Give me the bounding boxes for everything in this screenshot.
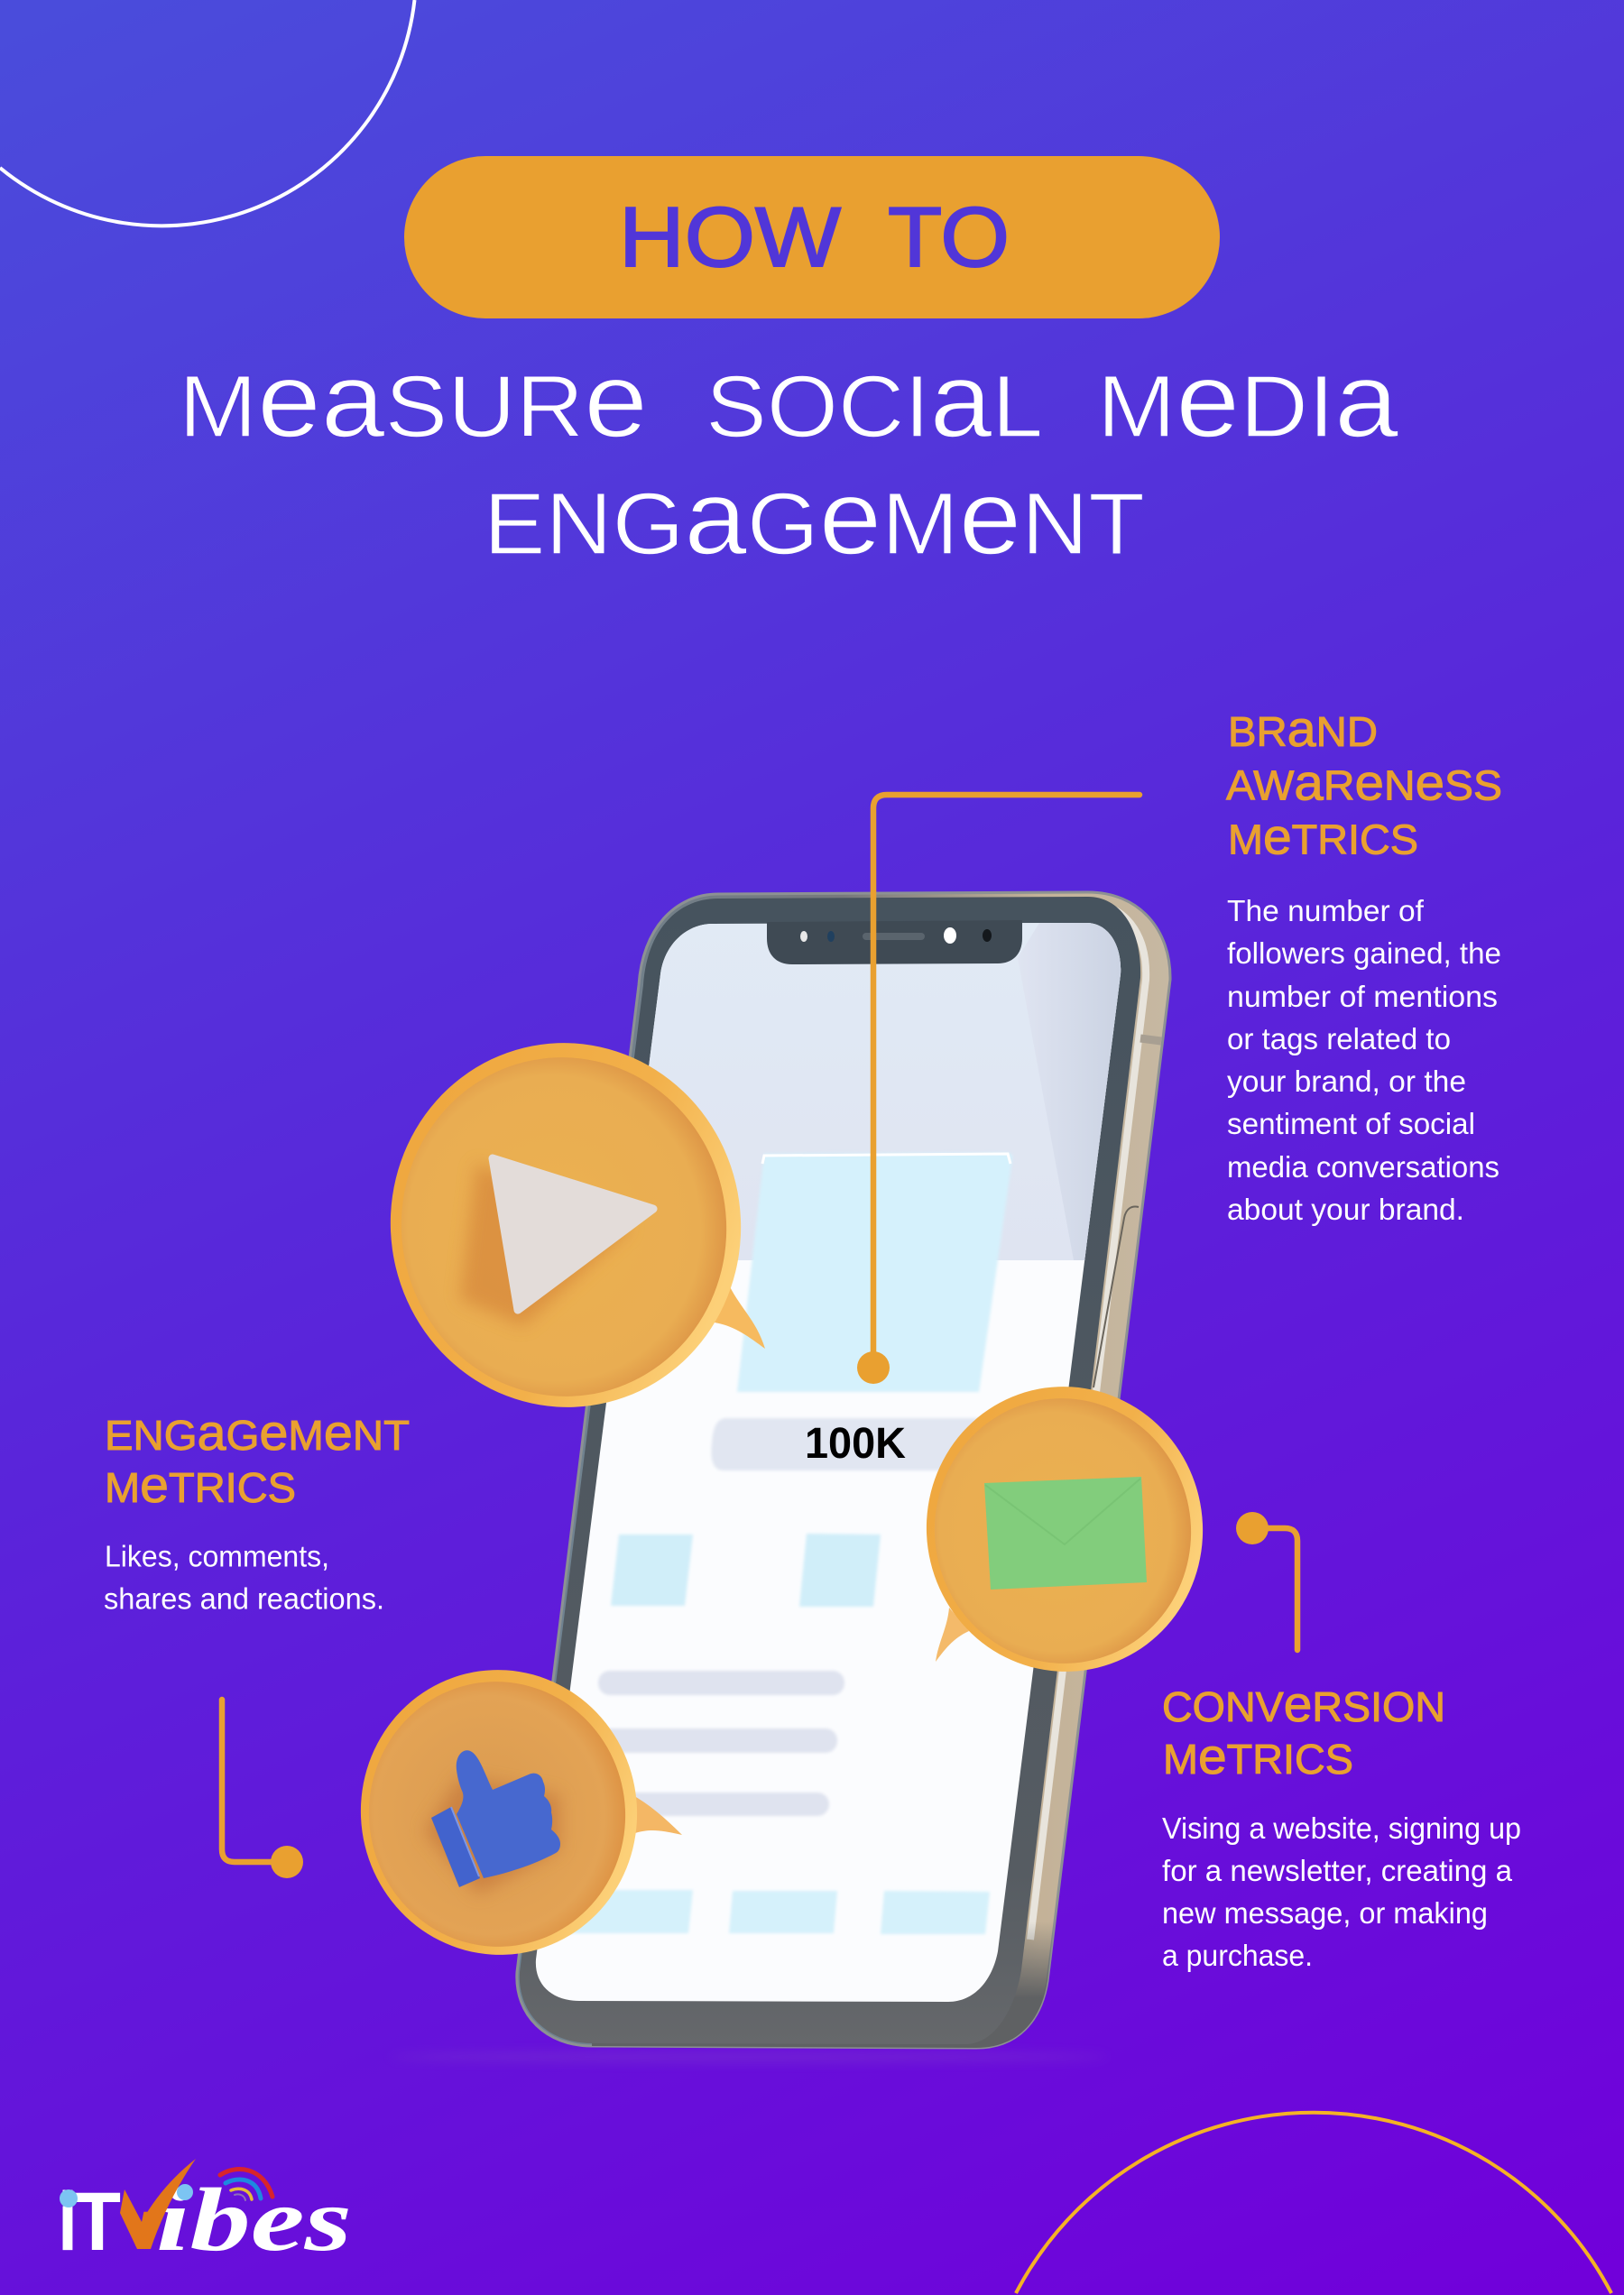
phone screen: [536, 923, 1121, 2002]
logo: iTVibes: i: [58, 2176, 78, 2268]
envelope: [984, 1477, 1147, 1590]
connector: engagement: [222, 1700, 303, 1878]
screen bottom tiles: [568, 1890, 990, 1934]
screen value pill: [711, 1418, 1010, 1470]
phone shadow: [388, 2051, 1110, 2062]
icon: thumbs up speech bubble: [342, 1652, 682, 1973]
heading: MeTRICS: [105, 1456, 296, 1513]
phone lower corner shading: [592, 1912, 1056, 2048]
phone: [505, 892, 1170, 2048]
heading: [1226, 700, 1502, 864]
heading: BRaND: [1228, 700, 1378, 757]
icon: mail speech bubble: [908, 1369, 1222, 1690]
pill text: [619, 189, 1010, 284]
heading: ENGaGeMeNT: [105, 1404, 410, 1461]
logo: iTVibes: T: [74, 2176, 121, 2268]
decorative circle bottom right: [1016, 2113, 1611, 2293]
heading: [105, 1404, 410, 1513]
phone metal frame: [517, 892, 1170, 2048]
title: measure social media engagement: SOCIaL: [706, 341, 1043, 460]
title: measure social media engagement: MeDIa: [1097, 341, 1398, 460]
title pill: how to: [404, 156, 1220, 318]
body text: sentiment of social: [1227, 1107, 1475, 1140]
logo check mark: [120, 2159, 196, 2249]
body text: about your brand.: [1227, 1193, 1464, 1226]
connector: brand awareness: [857, 795, 1140, 1384]
body text: Vising a website, signing up: [1162, 1811, 1521, 1845]
panel: engagement metrics: [104, 1404, 410, 1615]
body text: Likes, comments,: [105, 1539, 329, 1573]
logo: iTVibes: V: [127, 2200, 149, 2257]
body text: or tags related to: [1227, 1022, 1451, 1055]
connector: conversion: [1236, 1512, 1297, 1650]
body text: a purchase.: [1162, 1939, 1313, 1972]
body text: new message, or making: [1162, 1896, 1488, 1930]
logo signal arcs: [220, 2170, 272, 2200]
logo: iTVibes: [58, 2159, 352, 2270]
pill text: HOW: [619, 189, 841, 284]
body text: followers gained, the: [1227, 936, 1501, 970]
100K value: 100K: [805, 1420, 906, 1468]
body text: [1162, 1811, 1521, 1972]
heading: AWaReNeSS: [1226, 754, 1502, 810]
body text: [104, 1539, 384, 1615]
body text: shares and reactions.: [104, 1582, 384, 1615]
screen thumbnails: [611, 1534, 881, 1607]
thumb: [431, 1750, 560, 1887]
icon: play speech bubble: [367, 1020, 765, 1430]
panel: conversion metrics: [1162, 1675, 1521, 1972]
body text: your brand, or the: [1227, 1065, 1466, 1098]
play triangle: [493, 1158, 653, 1310]
screen text lines: [577, 1671, 844, 1816]
screen image panel: [737, 1153, 1012, 1392]
phone highlights: [1030, 904, 1161, 1940]
body text: media conversations: [1227, 1150, 1499, 1184]
heading: CONVeRSION: [1162, 1675, 1445, 1732]
heading: [1162, 1675, 1445, 1784]
decorative circle top left: [0, 0, 415, 226]
phone bezel: [520, 897, 1140, 2044]
body text: number of mentions: [1227, 980, 1498, 1013]
title: measure social media engagement: [179, 341, 1398, 577]
title: measure social media engagement: ENGaGeMeNT: [484, 458, 1145, 577]
logo: iTVibes: ibes: [156, 2170, 352, 2270]
body text: [1227, 894, 1501, 1226]
heading: MeTRICS: [1163, 1728, 1353, 1784]
pill text: TO: [888, 189, 1010, 284]
body text: for a newsletter, creating a: [1162, 1854, 1513, 1887]
heading: MeTRICS: [1228, 808, 1418, 864]
body text: The number of: [1227, 894, 1425, 927]
phone notch: [767, 920, 1022, 964]
panel: brand awareness metrics: [1226, 700, 1502, 1226]
title: measure social media engagement: MeaSURe: [179, 341, 648, 460]
